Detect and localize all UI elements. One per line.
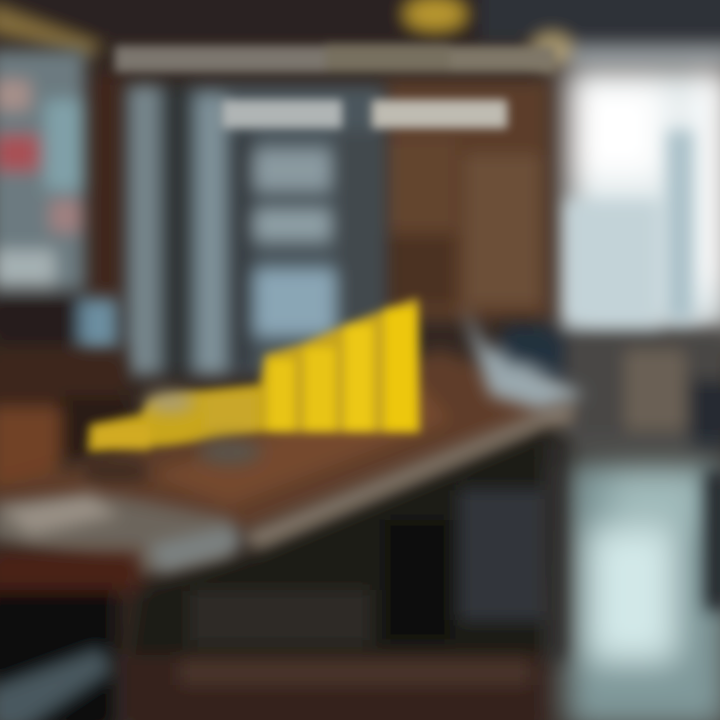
left shelf <box>0 50 118 353</box>
ceiling <box>0 0 720 66</box>
icon: paper plane shape <box>462 305 585 410</box>
background wall <box>84 52 488 720</box>
floor reflection <box>565 460 720 720</box>
left counter <box>0 350 130 493</box>
wood panel behind shelves <box>90 75 550 320</box>
space under table <box>0 430 570 720</box>
desk items <box>0 392 262 572</box>
blurred heading band <box>115 44 555 128</box>
central shelves <box>125 85 385 375</box>
table top <box>0 350 570 575</box>
window: bright right side <box>565 65 720 335</box>
yellow bar chart <box>88 298 420 452</box>
